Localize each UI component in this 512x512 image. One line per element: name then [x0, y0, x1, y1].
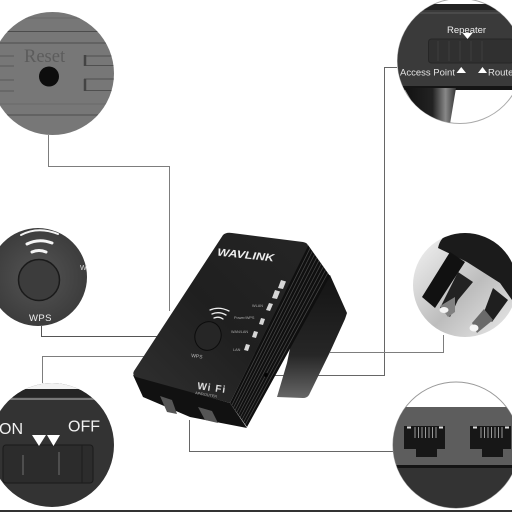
label: Reset: Reset: [24, 47, 66, 67]
plug housing: [277, 275, 347, 398]
device: Wavlink router: [133, 233, 347, 428]
ribbed side: [230, 245, 330, 427]
wifi arcs: [21, 230, 58, 252]
connector lines: [42, 68, 444, 452]
arrows: switch position: [32, 435, 60, 446]
LED indicators: [244, 280, 286, 351]
reset hole: [39, 66, 59, 86]
top pin: [422, 252, 465, 308]
panel: LAN ports detail: [390, 382, 512, 510]
logo: WAVLINK: WAVLINK: [217, 247, 276, 265]
clipped label: W: [80, 265, 87, 272]
LED labels: LAN: [233, 348, 241, 352]
LED labels: WAN/LAN: [231, 330, 248, 334]
panel: reset detail: [0, 12, 114, 135]
panel: mode switch detail: [390, 0, 512, 124]
logo: Wi-Fi: Wi Fi: [197, 381, 226, 396]
LED labels: Power/WPS: [234, 316, 255, 320]
WPS button: [18, 260, 60, 300]
bottom face with ports: [133, 375, 247, 428]
LAN port 2: [470, 426, 511, 457]
right pin: [484, 288, 508, 322]
panel: plug detail: [413, 232, 512, 337]
label: OFF: OFF: [68, 418, 100, 436]
label: Access Point: Access Point: [400, 68, 455, 78]
lower-left pin: [440, 272, 473, 317]
wifi arcs: [210, 308, 229, 319]
label: WPS: WPS: [29, 313, 52, 324]
side port: [264, 373, 268, 377]
LAN port 1: [404, 426, 445, 457]
label: WPS: WPS: [191, 353, 203, 361]
label: AP router: AP/ROUTER: [195, 391, 218, 399]
panel: on off switch detail: [0, 383, 120, 507]
WPS button: [191, 318, 225, 354]
front face: [133, 233, 308, 403]
port openings: [160, 396, 177, 414]
arrow: repeater: [462, 33, 472, 39]
panel: WPS detail: [0, 228, 87, 326]
LED labels: WLAN: [252, 304, 263, 308]
arrow: access point: [456, 67, 466, 73]
bottom edge line: [0, 510, 512, 512]
LED labels: [231, 304, 263, 352]
arrow: router: [478, 67, 487, 73]
label: Repeater: Repeater: [447, 25, 486, 36]
